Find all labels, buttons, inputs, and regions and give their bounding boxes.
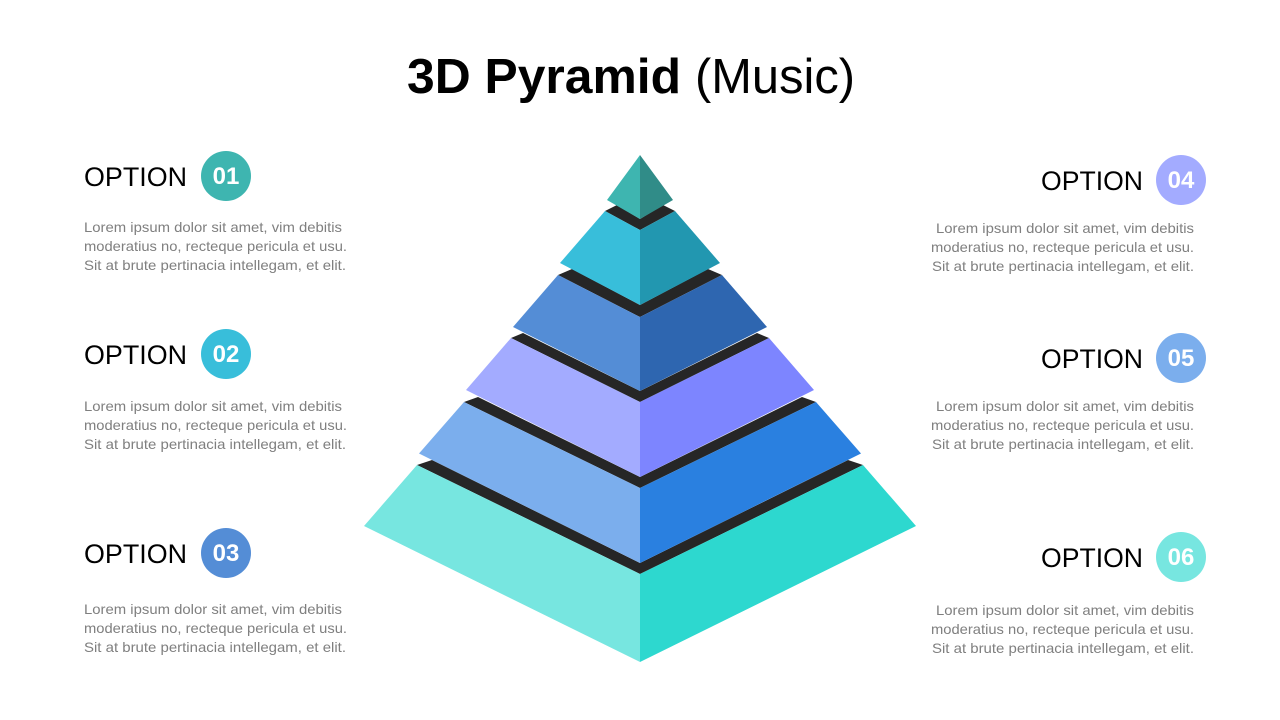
option 03: Lorem ipsum dolor sit amet, vim debitis [84, 601, 342, 617]
tier 3 [513, 275, 767, 391]
tier 6 [364, 465, 916, 662]
option 01: 01 [213, 163, 239, 190]
option 05: moderatius no, recteque pericula et usu. [931, 417, 1194, 433]
option 03: Sit at brute pertinacia intellegam, et elit. [84, 639, 346, 655]
option 05: Sit at brute pertinacia intellegam, et elit. [932, 436, 1194, 452]
option 01: Sit at brute pertinacia intellegam, et elit. [84, 257, 346, 273]
option 01 [84, 151, 347, 273]
option 02: moderatius no, recteque pericula et usu. [84, 417, 347, 433]
pyramid diagram [364, 155, 916, 662]
option 02: OPTION [84, 340, 187, 370]
option 02: 02 [213, 341, 239, 368]
option 06: Lorem ipsum dolor sit amet, vim debitis [936, 602, 1194, 618]
option 06: Sit at brute pertinacia intellegam, et elit. [932, 640, 1194, 656]
option 04 [931, 155, 1206, 274]
option 04: moderatius no, recteque pericula et usu. [931, 239, 1194, 255]
option 02: Lorem ipsum dolor sit amet, vim debitis [84, 398, 342, 414]
title: (Music) [695, 50, 855, 104]
tier 4 [466, 338, 814, 477]
tier 1 [607, 155, 673, 219]
option 04: Sit at brute pertinacia intellegam, et elit. [932, 258, 1194, 274]
option 05: Lorem ipsum dolor sit amet, vim debitis [936, 398, 1194, 414]
option 06: OPTION [1041, 543, 1143, 573]
option 05 [931, 333, 1206, 452]
option 02: Sit at brute pertinacia intellegam, et elit. [84, 436, 346, 452]
tier 5 [419, 402, 861, 563]
option 03 [84, 528, 347, 655]
option 05: OPTION [1041, 344, 1143, 374]
option 01: moderatius no, recteque pericula et usu. [84, 238, 347, 254]
option 03: OPTION [84, 539, 187, 569]
option 04: 04 [1168, 167, 1195, 194]
option 01: Lorem ipsum dolor sit amet, vim debitis [84, 219, 342, 235]
tier 2 [560, 211, 720, 305]
option 04: Lorem ipsum dolor sit amet, vim debitis [936, 220, 1194, 236]
option 04: OPTION [1041, 166, 1143, 196]
option 05: 05 [1168, 345, 1194, 372]
option 02 [84, 329, 347, 452]
option 03: moderatius no, recteque pericula et usu. [84, 620, 347, 636]
option 01: OPTION [84, 162, 187, 192]
option 06 [931, 532, 1206, 656]
title [407, 50, 855, 104]
option 06: 06 [1168, 544, 1194, 571]
title: 3D Pyramid [407, 50, 681, 104]
option 03: 03 [213, 540, 239, 567]
option 06: moderatius no, recteque pericula et usu. [931, 621, 1194, 637]
